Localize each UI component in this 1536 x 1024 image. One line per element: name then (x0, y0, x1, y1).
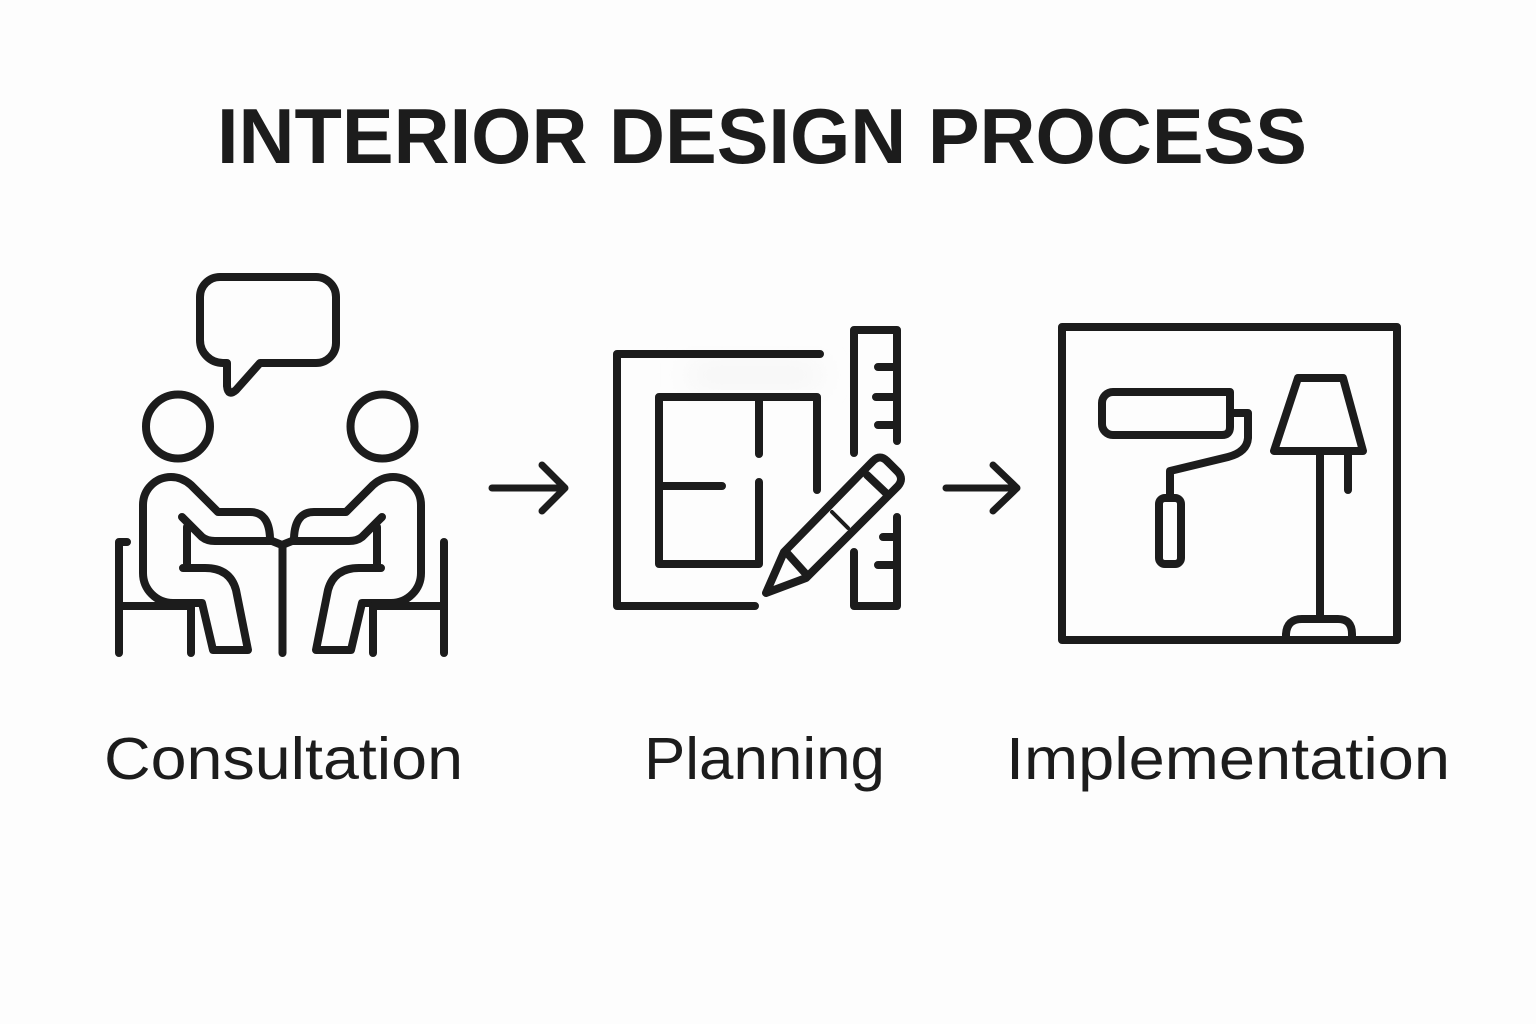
arrow 1 (492, 465, 565, 511)
pencil bands (787, 475, 887, 573)
title: INTERIOR DESIGN PROCESS (217, 92, 1307, 180)
left head (146, 394, 210, 458)
lamp pole (1316, 453, 1324, 618)
lamp shade (1274, 378, 1363, 451)
label: consultation: Consultation (104, 726, 463, 792)
table leg (278, 547, 286, 653)
frame (1062, 327, 1397, 640)
pencil mid band (832, 512, 848, 528)
lamp base (1286, 619, 1352, 637)
right head (350, 394, 414, 458)
pencil (766, 458, 901, 593)
roller handle (1159, 498, 1181, 564)
roller arm (1170, 413, 1248, 497)
right person and chair (282, 477, 444, 653)
icon: planning (617, 330, 901, 606)
soft shadow (690, 362, 820, 388)
floor plan (659, 397, 817, 564)
arrow 2 (946, 465, 1017, 511)
ruler bottom (854, 517, 897, 606)
icon: implementation (1062, 327, 1397, 640)
ruler top (854, 330, 897, 453)
speech bubble (200, 277, 336, 393)
label: implementation: Implementation (1006, 726, 1450, 792)
outer plan frame (617, 354, 820, 606)
icon: consultation (119, 277, 444, 653)
paint roller (1102, 392, 1230, 435)
left person and chair (119, 477, 282, 653)
label: planning: Planning (644, 726, 885, 792)
lamp pull cord (1344, 453, 1352, 490)
